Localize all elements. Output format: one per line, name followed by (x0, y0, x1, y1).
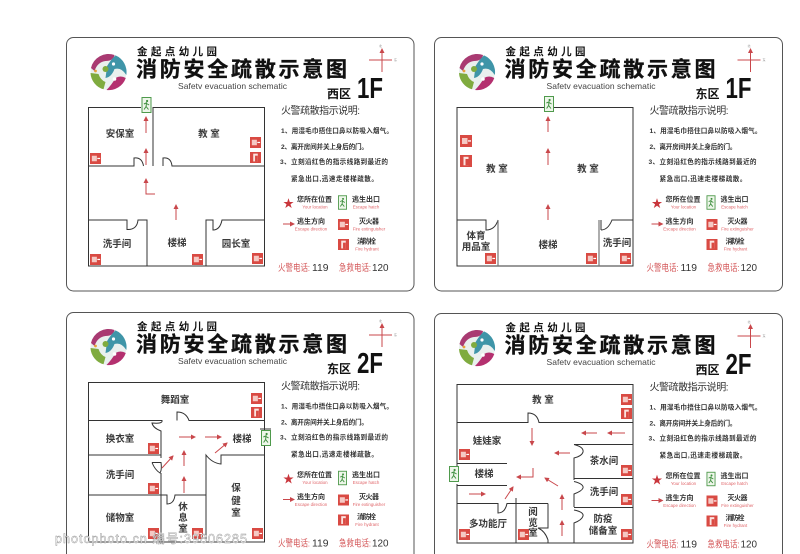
legend: escape hatch (707, 471, 748, 486)
instructions heading: 火警疏散指示说明: (650, 104, 728, 117)
room label: 储物室 (106, 512, 134, 524)
legend: fire hydrant: Fire hydrant (724, 246, 748, 252)
room label: vertical (528, 506, 538, 539)
exit sign (544, 96, 554, 112)
exit sign (142, 98, 151, 112)
legend: your location: 您所在位置 (666, 194, 700, 204)
emergency phone: 急救电话: (339, 262, 371, 274)
header (459, 319, 766, 381)
zone label: 西区 (327, 87, 351, 101)
instruction 1: 1、用湿毛巾捂住口鼻以防吸入烟气。 (281, 126, 393, 135)
escape arrows (146, 117, 176, 220)
room label: 洗手间 (590, 486, 618, 498)
legend: your location (652, 194, 700, 210)
logo (90, 329, 127, 365)
room label: 储备室 (589, 525, 617, 537)
floor plan (457, 96, 633, 266)
room label: 园长室 (222, 238, 250, 250)
legend: escape hatch (707, 194, 748, 210)
instruction 1: 1、用湿毛巾捂住口鼻以防吸入烟气。 (650, 402, 762, 412)
legend: your location: ★ (283, 198, 294, 210)
legend: escape hatch: 逃生出口 (352, 194, 380, 204)
legend: fire hydrant: Fire hydrant (355, 522, 379, 527)
main title: 消防安全疏散示意图 (136, 332, 347, 356)
room label: 洗手间 (103, 238, 131, 250)
room label: 楼梯 (167, 237, 187, 249)
legend: fire hydrant: 消防栓 (726, 236, 744, 246)
walls (88, 382, 271, 542)
compass: 东 (394, 332, 397, 337)
compass: 北 (748, 43, 751, 48)
legend: fire extinguisher: Fire extinguisher (721, 226, 754, 232)
floor label: 1F (726, 73, 752, 105)
instruction 2: 2、离开房间并关上身后的门。 (281, 142, 368, 151)
legend: escape direction: Escape direction (295, 502, 328, 507)
legend: escape hatch: 逃生出口 (720, 194, 748, 204)
zone label: 东区 (327, 361, 351, 376)
legend: escape direction: 逃生方向 (666, 216, 694, 226)
legend: fire hydrant (338, 512, 379, 527)
logo (90, 54, 127, 90)
room label: 用品室 (462, 241, 490, 253)
legend: your location: 您所在位置 (297, 470, 332, 479)
instruction 3 continued: 紧急出口,迅速走楼梯疏散。 (291, 174, 378, 183)
legend: fire extinguisher: Fire extinguisher (721, 503, 754, 508)
header (459, 43, 766, 105)
legend: escape direction: Escape direction (295, 226, 328, 232)
legend: fire extinguisher: 灭火器 (359, 493, 379, 501)
instruction 3 continued: 紧急出口,迅速走楼梯疏散。 (660, 174, 746, 183)
compass: 北 (748, 319, 751, 324)
school name: 金起点幼儿园 (137, 320, 217, 333)
legend: escape hatch: 逃生出口 (352, 470, 380, 479)
room label: vertical: 室 (231, 507, 241, 519)
room label: 洗手间 (603, 237, 631, 249)
school name: 金起点幼儿园 (506, 45, 586, 58)
instruction 1: 1、用湿毛巾捂住口鼻以防吸入烟气。 (281, 402, 393, 410)
legend: fire hydrant (706, 513, 748, 528)
instructions heading: 火警疏散指示说明: (650, 380, 728, 394)
main title: 消防安全疏散示意图 (136, 58, 347, 82)
room label: 体育 (466, 230, 486, 242)
panel: 东区 1F (434, 38, 782, 291)
exit sign (262, 430, 270, 446)
header (90, 318, 397, 380)
room label: 教 室 (486, 163, 508, 175)
walls (457, 384, 633, 543)
instructions and legend (278, 380, 393, 550)
escape arrows (469, 428, 625, 536)
room label: 楼梯 (538, 239, 558, 251)
room label: vertical: 休 (178, 501, 188, 513)
school name: 金起点幼儿园 (506, 321, 586, 334)
floor plan (88, 98, 264, 266)
room label: 安保室 (106, 128, 134, 140)
legend: escape hatch: 逃生出口 (720, 471, 748, 480)
emergency phone: 急救电话: (339, 538, 371, 550)
logo (459, 54, 495, 90)
room label: vertical: 室 (528, 527, 538, 539)
logo (459, 330, 495, 366)
emergency phone: 120 (740, 540, 757, 550)
watermark: photophoto.cn 编号:39806285 (55, 531, 247, 546)
legend: escape direction (283, 216, 328, 232)
legend: fire extinguisher: 灭火器 (728, 494, 748, 502)
instruction 3: 3、立刻沿红色的指示线路到最近的 (648, 434, 757, 442)
fire equipment icons (90, 137, 263, 265)
fire phone: 119 (680, 263, 697, 274)
english subtitle: Safetv evacuation schematic (546, 81, 656, 91)
room label: 防疫 (593, 513, 613, 525)
panel: 西区 2F (434, 314, 782, 554)
instruction 3: 3、立刻沿红色的指示线路到最近的 (280, 157, 388, 166)
compass (738, 319, 766, 348)
compass (369, 318, 397, 347)
panel: 东区 2F (66, 312, 414, 554)
legend: fire extinguisher: Fire extinguisher (353, 502, 386, 507)
instructions and legend (646, 104, 762, 274)
legend: your location: Your location (671, 481, 697, 486)
legend: your location: ★ (652, 474, 662, 486)
compass: 北 (379, 318, 382, 323)
zone label: 东区 (696, 86, 720, 101)
instruction 2: 2、离开房间并关上身后的门。 (650, 418, 736, 428)
panel: 西区 1F (66, 38, 414, 291)
room label: 洗手间 (106, 469, 134, 481)
legend: fire hydrant: Fire hydrant (355, 246, 379, 252)
room label: vertical: 览 (528, 517, 538, 529)
emergency phone: 急救电话: (708, 538, 740, 550)
room label: 茶水间 (590, 455, 618, 467)
legend: fire extinguisher (706, 494, 754, 508)
legend: fire extinguisher (706, 218, 754, 232)
floor label: 2F (726, 349, 752, 381)
card frame (66, 312, 414, 554)
fire phone: 火警电话: (278, 538, 310, 550)
legend: your location (283, 470, 332, 486)
compass: 东 (762, 333, 766, 338)
school name: 金起点幼儿园 (137, 45, 217, 58)
compass: 东 (394, 57, 397, 62)
fire equipment icons (148, 393, 263, 539)
room label: 教 室 (577, 163, 599, 175)
fire equipment icons (459, 394, 632, 540)
legend: your location: 您所在位置 (297, 194, 332, 204)
legend: fire extinguisher: 灭火器 (728, 218, 748, 226)
legend: fire hydrant: 消防栓 (357, 236, 376, 246)
escape arrows (162, 437, 227, 493)
emergency phone: 120 (372, 263, 389, 274)
legend: fire hydrant: Fire hydrant (724, 523, 748, 528)
legend: escape hatch: Escape hatch (353, 204, 380, 210)
legend: your location: ★ (283, 474, 294, 486)
instruction 2: 2、离开房间并关上身后的门。 (650, 142, 736, 151)
legend: your location: ★ (652, 198, 662, 210)
room label: 楼梯 (474, 468, 494, 480)
emergency phone: 120 (372, 538, 389, 550)
card frame (66, 38, 414, 291)
legend: fire hydrant (338, 236, 379, 252)
compass (369, 43, 397, 72)
legend: escape direction: Escape direction (663, 226, 696, 232)
legend: escape direction (652, 493, 696, 508)
fire phone: 火警电话: (646, 262, 678, 274)
legend: your location (283, 194, 332, 210)
instruction 3: 3、立刻沿红色的指示线路到最近的 (648, 157, 757, 166)
room label: vertical: 阅 (528, 506, 538, 518)
room label: vertical: 健 (231, 495, 241, 507)
zone label: 西区 (696, 363, 720, 377)
legend: fire hydrant: 消防栓 (357, 512, 376, 521)
compass: 北 (379, 43, 382, 48)
instruction 3: 3、立刻沿红色的指示线路到最近的 (280, 432, 388, 442)
legend: escape direction: 逃生方向 (297, 492, 325, 501)
room label: vertical (178, 501, 188, 535)
compass (738, 43, 766, 72)
fire phone: 火警电话: (646, 538, 678, 550)
legend: your location: Your location (302, 204, 328, 210)
legend: your location: 您所在位置 (666, 471, 700, 480)
legend: fire extinguisher (338, 218, 386, 232)
legend: escape direction (652, 216, 696, 232)
legend: escape direction: 逃生方向 (666, 493, 694, 502)
fire phone: 119 (312, 538, 329, 550)
legend: fire hydrant: 消防栓 (726, 513, 744, 522)
instructions and legend (646, 380, 762, 550)
room label: vertical: 保 (231, 482, 241, 494)
instruction 1: 1、用湿毛巾捂住口鼻以防吸入烟气。 (650, 126, 762, 135)
walls (457, 108, 633, 266)
instruction 3 continued: 紧急出口,迅速走楼梯疏散。 (660, 450, 746, 460)
fire equipment icons (460, 135, 631, 264)
floor plan (450, 384, 633, 543)
instructions and legend (278, 104, 393, 274)
instructions heading: 火警疏散指示说明: (281, 380, 360, 392)
english subtitle: Safetv evacuation schematic (178, 356, 288, 366)
legend: escape hatch (338, 194, 380, 210)
exit sign (450, 466, 458, 482)
compass: 东 (762, 57, 766, 62)
floor label: 1F (357, 73, 383, 105)
english subtitle: Safetv evacuation schematic (546, 357, 656, 367)
fire phone: 119 (312, 263, 329, 274)
legend: escape hatch (338, 470, 380, 485)
room label: vertical: 室 (178, 523, 188, 535)
main title: 消防安全疏散示意图 (504, 58, 716, 82)
legend: escape hatch: Escape hatch (721, 204, 748, 210)
card frame (434, 38, 782, 291)
english subtitle: Safetv evacuation schematic (178, 81, 288, 91)
instruction 2: 2、离开房间并关上身后的门。 (281, 418, 368, 426)
room label: vertical: 息 (178, 512, 188, 524)
legend: escape direction (283, 492, 328, 507)
floor label: 2F (357, 348, 383, 380)
legend: escape hatch: Escape hatch (721, 481, 748, 486)
room label: 娃娃家 (473, 435, 502, 447)
emergency phone: 120 (740, 263, 757, 274)
stair side walls (498, 220, 599, 266)
floor plan (88, 382, 271, 542)
room label: 多功能厅 (469, 518, 507, 530)
room label: 舞蹈室 (161, 394, 189, 406)
emergency phone: 急救电话: (708, 262, 740, 274)
legend: your location (652, 471, 700, 486)
room label: 楼梯 (232, 433, 252, 445)
room label: 换衣室 (106, 433, 134, 445)
legend: your location: Your location (671, 204, 697, 210)
instructions heading: 火警疏散指示说明: (281, 104, 360, 117)
room label: 教 室 (532, 394, 554, 406)
room label: 教 室 (198, 128, 220, 140)
legend: fire extinguisher (338, 493, 386, 507)
main title: 消防安全疏散示意图 (504, 334, 716, 358)
fire phone: 火警电话: (278, 262, 310, 274)
room label: vertical (231, 482, 241, 519)
walls (88, 108, 264, 266)
fire phone: 119 (680, 540, 697, 550)
legend: your location: Your location (302, 480, 328, 485)
legend: escape direction: Escape direction (663, 503, 696, 508)
card frame (434, 314, 782, 554)
header (90, 43, 397, 105)
legend: escape direction: 逃生方向 (297, 216, 325, 226)
legend: escape hatch: Escape hatch (353, 480, 380, 485)
legend: fire extinguisher: 灭火器 (359, 218, 379, 226)
legend: fire hydrant (706, 236, 748, 252)
legend: fire extinguisher: Fire extinguisher (353, 226, 386, 232)
escape arrows (547, 117, 549, 220)
instruction 3 continued: 紧急出口,迅速走楼梯疏散。 (291, 450, 378, 458)
